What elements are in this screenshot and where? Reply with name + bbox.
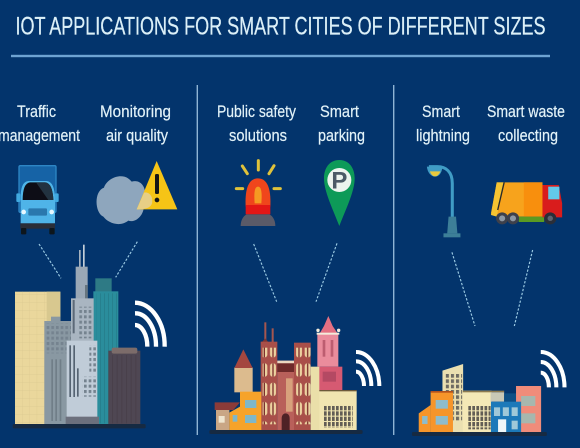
label: monitoring air quality: air quality bbox=[106, 126, 168, 145]
label: smart waste collecting: Smart waste bbox=[487, 102, 565, 121]
connector: siren to city bbox=[254, 244, 277, 302]
connector: cloud to city bbox=[116, 242, 137, 277]
label: monitoring air quality: Monitoring bbox=[100, 102, 171, 121]
connector: truck to city bbox=[514, 250, 533, 326]
icon: parking pin bbox=[324, 160, 355, 226]
illustration: small town bbox=[412, 364, 547, 436]
label: smart lightning: lightning bbox=[416, 126, 470, 145]
label: traffic management: management bbox=[0, 126, 80, 145]
label: smart lightning: Smart bbox=[422, 102, 460, 121]
label: public safety solutions: Public safety bbox=[217, 102, 296, 121]
label: smart waste collecting: collecting bbox=[498, 126, 558, 145]
icon: parking pin: P bbox=[331, 168, 347, 195]
label: smart parking: Smart bbox=[320, 102, 359, 121]
connector: pin to city bbox=[316, 243, 337, 302]
label: smart parking: parking bbox=[318, 126, 365, 145]
icon: wifi signal small town bbox=[541, 352, 564, 387]
illustration: medium town bbox=[209, 316, 363, 434]
icon: air quality cloud and warning bbox=[97, 161, 177, 224]
label: traffic management: Traffic bbox=[17, 102, 56, 121]
icon: wifi signal large city bbox=[135, 303, 165, 347]
icon: garbage truck bbox=[491, 182, 562, 224]
icon: wifi signal medium town bbox=[356, 352, 379, 386]
icon: alarm siren bbox=[236, 161, 280, 226]
connector: truck to city bbox=[39, 244, 61, 278]
icon: street lamp bbox=[427, 167, 460, 237]
icon: delivery truck bbox=[16, 166, 59, 234]
label: public safety solutions: solutions bbox=[229, 126, 287, 145]
illustration: large city skyline bbox=[13, 245, 146, 428]
connector: lamp to city bbox=[452, 252, 475, 326]
